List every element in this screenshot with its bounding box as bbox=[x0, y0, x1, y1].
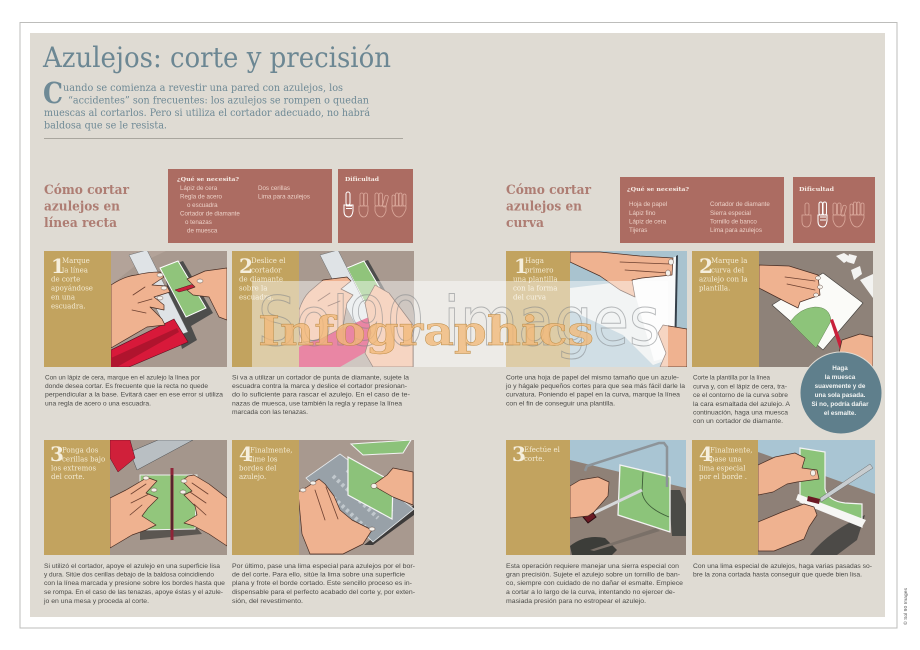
intro text: muescas al cortarlos. Pero si utiliza el cortador adecuado, no habrá bbox=[44, 107, 370, 119]
icon: one finger bbox=[802, 203, 811, 227]
illustration: tracing the curve bbox=[759, 251, 873, 367]
step heading: una plantilla bbox=[513, 276, 558, 284]
panel: difficulty, straight cut: Dificultad bbox=[345, 177, 379, 183]
step heading: la línea bbox=[62, 266, 88, 274]
step heading: plantilla. bbox=[699, 284, 730, 292]
step heading: cortador bbox=[251, 266, 282, 274]
step number: 4 bbox=[699, 442, 713, 466]
step heading: bordes del bbox=[239, 464, 277, 472]
step heading: Finalmente, bbox=[710, 446, 752, 454]
step heading bbox=[699, 446, 752, 481]
panel: materials, curved cut: Hoja de papel bbox=[629, 201, 667, 208]
text: curve 3: gran precisión. Sujete el azulejo sobre un tornillo de ban- bbox=[506, 572, 680, 578]
panel: materials, curved cut: Lima para azulejos bbox=[710, 227, 762, 234]
text: straight 4: sión, del revestimento. bbox=[232, 598, 303, 605]
step heading: Ponga dos bbox=[62, 446, 99, 454]
heading: straight cut: Cómo cortar bbox=[44, 183, 129, 198]
panel: materials, straight cut: de muesca bbox=[187, 228, 218, 234]
callout: tip bubble: suavemente y de bbox=[815, 383, 866, 390]
heading: straight cut: línea recta bbox=[44, 216, 118, 231]
step heading: del corte. bbox=[51, 473, 85, 481]
intro text: “accidentes” son frecuentes: los azulejos se rompen o quedan bbox=[68, 94, 369, 106]
text: curve 4: Con una lima especial de azulejos, haga varias pasadas so- bbox=[693, 563, 872, 570]
step: straight 4 bbox=[232, 440, 414, 555]
heading: curved cut: curva bbox=[506, 216, 545, 231]
icon: two fingers bbox=[359, 193, 368, 217]
step heading: Deslice el bbox=[251, 257, 286, 265]
text: straight 3: y dura. Sitúe dos cerillas debajo de la baldosa coincidiendo bbox=[44, 572, 215, 578]
intro text: uando se comienza a revestir una pared con azulejos, los bbox=[63, 82, 343, 94]
text: curve 2: la cara esmaltada del azulejo. A bbox=[693, 401, 791, 408]
step heading bbox=[239, 257, 286, 302]
icon: three fingers bbox=[375, 193, 389, 217]
step heading: de corte bbox=[51, 276, 80, 284]
watermark: Sol90 images bbox=[258, 283, 660, 362]
step heading: en una bbox=[51, 294, 75, 302]
heading: straight cut bbox=[44, 183, 129, 231]
step heading: primero bbox=[525, 266, 553, 274]
callout: tip bubble bbox=[800, 352, 882, 434]
panel: materials, curved cut: Tornillo de banco bbox=[710, 218, 757, 226]
intro text: C bbox=[43, 76, 63, 110]
illustration: filing the edge bbox=[299, 440, 414, 555]
panel: difficulty, straight cut bbox=[338, 169, 413, 243]
step number: 2 bbox=[239, 254, 253, 278]
text: curve 2 bbox=[693, 374, 791, 425]
panel: materials, straight cut bbox=[168, 169, 332, 243]
panel: materials, curved cut: Sierra especial bbox=[710, 210, 751, 217]
step heading bbox=[51, 446, 105, 481]
step heading: Efectúe el bbox=[524, 446, 561, 454]
text: straight 3: jo en una mesa y proceda al corte. bbox=[43, 598, 149, 605]
text: straight 3 bbox=[43, 563, 226, 605]
panel: materials, straight cut: Regla de acero bbox=[180, 194, 223, 200]
illustration: scoring with cutter bbox=[299, 251, 414, 367]
text: curve 3: masiada presión para no estropear el azulejo. bbox=[506, 598, 646, 605]
panel: materials, curved cut bbox=[620, 177, 784, 243]
step heading: corte. bbox=[524, 455, 545, 463]
intro text: baldosa que se le resista. bbox=[44, 120, 167, 132]
text: curve 3: Esta operación requiere manejar una sierra especial con bbox=[506, 563, 680, 570]
step heading: azulejo con la bbox=[699, 276, 748, 284]
panel: materials, straight cut: Lima para azulejos bbox=[258, 194, 310, 200]
panel: materials, curved cut: Lápiz fino bbox=[629, 210, 656, 217]
step heading: cerillas bajo bbox=[62, 456, 105, 464]
text: straight 2: escuadra contra la marca y deslice el cortador presionan- bbox=[232, 383, 407, 390]
step heading: los extremos bbox=[51, 464, 97, 472]
step heading bbox=[699, 257, 748, 292]
text: straight 3: Si utilizó el cortador, apoye el azulejo en una superficie lisa bbox=[44, 563, 221, 570]
panel: materials, straight cut: o escuadra bbox=[187, 202, 218, 209]
illustration: sawing the tile bbox=[570, 440, 686, 555]
step number: 1 bbox=[514, 254, 528, 278]
text: straight 4 bbox=[232, 563, 415, 605]
text: straight 1: perpendicular a la base. Evitará caer en ese error si utiliza bbox=[45, 392, 224, 398]
text: straight 2: marcada con las tenazas. bbox=[232, 409, 308, 416]
callout: tip bubble: Si no, podría dañar bbox=[811, 401, 869, 408]
illustration: filing the curve bbox=[758, 440, 875, 555]
step number: 1 bbox=[51, 254, 65, 278]
callout: tip bubble: el esmalte. bbox=[824, 410, 856, 417]
step: curve 1 bbox=[506, 251, 687, 367]
panel: materials, curved cut: ¿Qué se necesita? bbox=[627, 186, 690, 193]
text: curve 2: ce el contorno de la curva sobre bbox=[693, 392, 789, 399]
panel: materials, straight cut: o tenazas bbox=[185, 219, 212, 226]
text: curve 1: con el fin de conseguir una plantilla. bbox=[506, 400, 615, 408]
callout: tip bubble: una sola pasada. bbox=[815, 392, 866, 399]
step: curve 2 bbox=[692, 251, 873, 367]
step number: 4 bbox=[239, 442, 253, 466]
step heading: escuadra. bbox=[239, 294, 274, 302]
panel: materials, curved cut: Tijeras bbox=[629, 227, 647, 234]
text: curve 4: bre la zona cortada hasta conseguir que quede bien lisa. bbox=[693, 572, 862, 578]
icon: two fingers, selected bbox=[818, 202, 827, 227]
text: straight 4: Por último, pase una lima especial para azulejos por el bor- bbox=[232, 563, 415, 570]
text: curve 2: Corte la plantilla por la línea bbox=[693, 374, 770, 382]
panel: materials, curved cut: Cortador de diamante bbox=[710, 201, 770, 208]
callout: tip bubble: Haga bbox=[832, 365, 848, 372]
panel: materials, straight cut: Dos cerillas bbox=[258, 185, 290, 192]
step heading: azulejo. bbox=[239, 473, 266, 481]
text: straight 2: Si va a utilizar un cortador de punta de diamante, sujete la bbox=[232, 374, 410, 382]
icon: one finger, selected bbox=[344, 192, 353, 217]
step: curve 3 bbox=[506, 440, 686, 555]
text: straight 4: de del corte. Para ello, sitúe la lima sobre una superficie bbox=[232, 572, 406, 578]
illustration: marking the tile bbox=[111, 251, 227, 367]
text: curve 2: curva y, con el lápiz de cera, tra- bbox=[693, 384, 787, 390]
text: curve 1: curvatura. Poniendo el papel en la curva, marque la línea bbox=[506, 392, 681, 398]
step number: 2 bbox=[699, 254, 713, 278]
step heading: Marque bbox=[62, 257, 90, 265]
heading: curved cut bbox=[506, 183, 591, 231]
panel: materials, curved cut: Lápiz de cera bbox=[629, 218, 667, 226]
callout: tip bubble: la muesca bbox=[825, 374, 856, 381]
step heading bbox=[239, 446, 292, 481]
text: curve 3: co, siempre con cuidado de no dañar el esmalte. Empiece bbox=[506, 580, 684, 587]
text: straight 3: con la línea marcada y presione sobre los bordes hasta que bbox=[44, 580, 226, 587]
step heading: por el borde . bbox=[699, 473, 747, 481]
text: straight 1: una regla de acero o una escuadra. bbox=[45, 400, 151, 408]
step heading bbox=[524, 446, 561, 463]
step heading bbox=[513, 257, 558, 302]
text: curve 1: jo y hágale pequeños cortes para que sea más fácil darle la bbox=[505, 383, 686, 390]
panel: materials, straight cut: ¿Qué se necesita? bbox=[177, 176, 240, 183]
step: straight 1 bbox=[44, 250, 227, 367]
illustration: paper template bbox=[570, 251, 687, 367]
step heading: pase una bbox=[710, 456, 742, 464]
text: curve 1 bbox=[505, 374, 686, 408]
panel: difficulty, curved cut: Dificultad bbox=[799, 187, 834, 193]
text: curve 2: continuación, haga una muesca bbox=[693, 410, 789, 416]
step: straight 2 bbox=[232, 250, 414, 367]
text: curve 1: Corte una hoja de papel del mismo tamaño que un azule- bbox=[506, 374, 679, 382]
text: straight 1: donde desea cortar. Es frecuente que la recta no quede bbox=[45, 383, 209, 390]
intro text bbox=[43, 76, 370, 132]
panel: difficulty, curved cut bbox=[793, 177, 875, 243]
step: curve 4 bbox=[692, 440, 875, 555]
step number: 3 bbox=[50, 442, 64, 466]
step heading: lima especial bbox=[699, 464, 746, 472]
illustration: breaking over matches bbox=[110, 440, 227, 555]
text: straight 4: plana y frote el borde cortado. Este sencillo proceso es in- bbox=[232, 580, 412, 587]
heading: straight cut: azulejos en bbox=[44, 200, 120, 214]
step heading: sobre la bbox=[239, 284, 267, 292]
step heading: lime los bbox=[250, 456, 278, 464]
step heading: Haga bbox=[525, 257, 544, 265]
watermark: Infographics bbox=[258, 308, 594, 355]
step: straight 3 bbox=[44, 440, 227, 555]
icon: four fingers bbox=[850, 202, 864, 227]
step heading: Finalmente, bbox=[250, 446, 292, 454]
step heading: Marque la bbox=[711, 257, 747, 265]
step heading: escuadra. bbox=[51, 302, 86, 310]
step heading: curva del bbox=[711, 266, 745, 274]
heading: curved cut: Cómo cortar bbox=[506, 183, 591, 198]
text: straight 1: Con un lápiz de cera, marque en el azulejo la línea por bbox=[45, 374, 200, 382]
text: curve 3: a cortar a lo largo de la curva, intentando no ejercer de- bbox=[506, 589, 675, 596]
text: straight 2: nazas de muesca, use también la regla y repase la línea bbox=[232, 400, 403, 408]
text: straight 3: se rompa. En el caso de las tenazas, apoye éstas y el azule- bbox=[44, 589, 223, 596]
step number: 3 bbox=[512, 442, 526, 466]
step heading: con la forma bbox=[513, 284, 557, 292]
panel: materials, straight cut: Cortador de diamante bbox=[180, 210, 240, 218]
icon: three fingers bbox=[833, 203, 847, 227]
text: curve 3 bbox=[506, 563, 684, 605]
step heading: apoyándose bbox=[51, 284, 93, 292]
text: curve 4 bbox=[693, 563, 872, 578]
icon: four fingers bbox=[392, 193, 406, 217]
heading: curved cut: azulejos en bbox=[506, 200, 582, 214]
text: straight 2: do lo suficiente para rascar el azulejo. En el caso de te- bbox=[232, 392, 410, 398]
step heading: de diamante bbox=[239, 276, 283, 284]
step heading bbox=[51, 257, 93, 310]
text: straight 2 bbox=[232, 374, 410, 416]
text: straight 4: dispensable para el perfecto acabado del corte y, por exten- bbox=[232, 589, 415, 596]
title: Azulejos: corte y precisión bbox=[42, 41, 391, 74]
step heading: del curva bbox=[513, 294, 546, 302]
credit: © Sol 90 Images bbox=[902, 587, 908, 625]
panel: materials, straight cut: Lápiz de cera bbox=[180, 185, 218, 192]
text: straight 1 bbox=[45, 374, 224, 408]
text: curve 2: con un cortador de diamante. bbox=[693, 418, 783, 425]
